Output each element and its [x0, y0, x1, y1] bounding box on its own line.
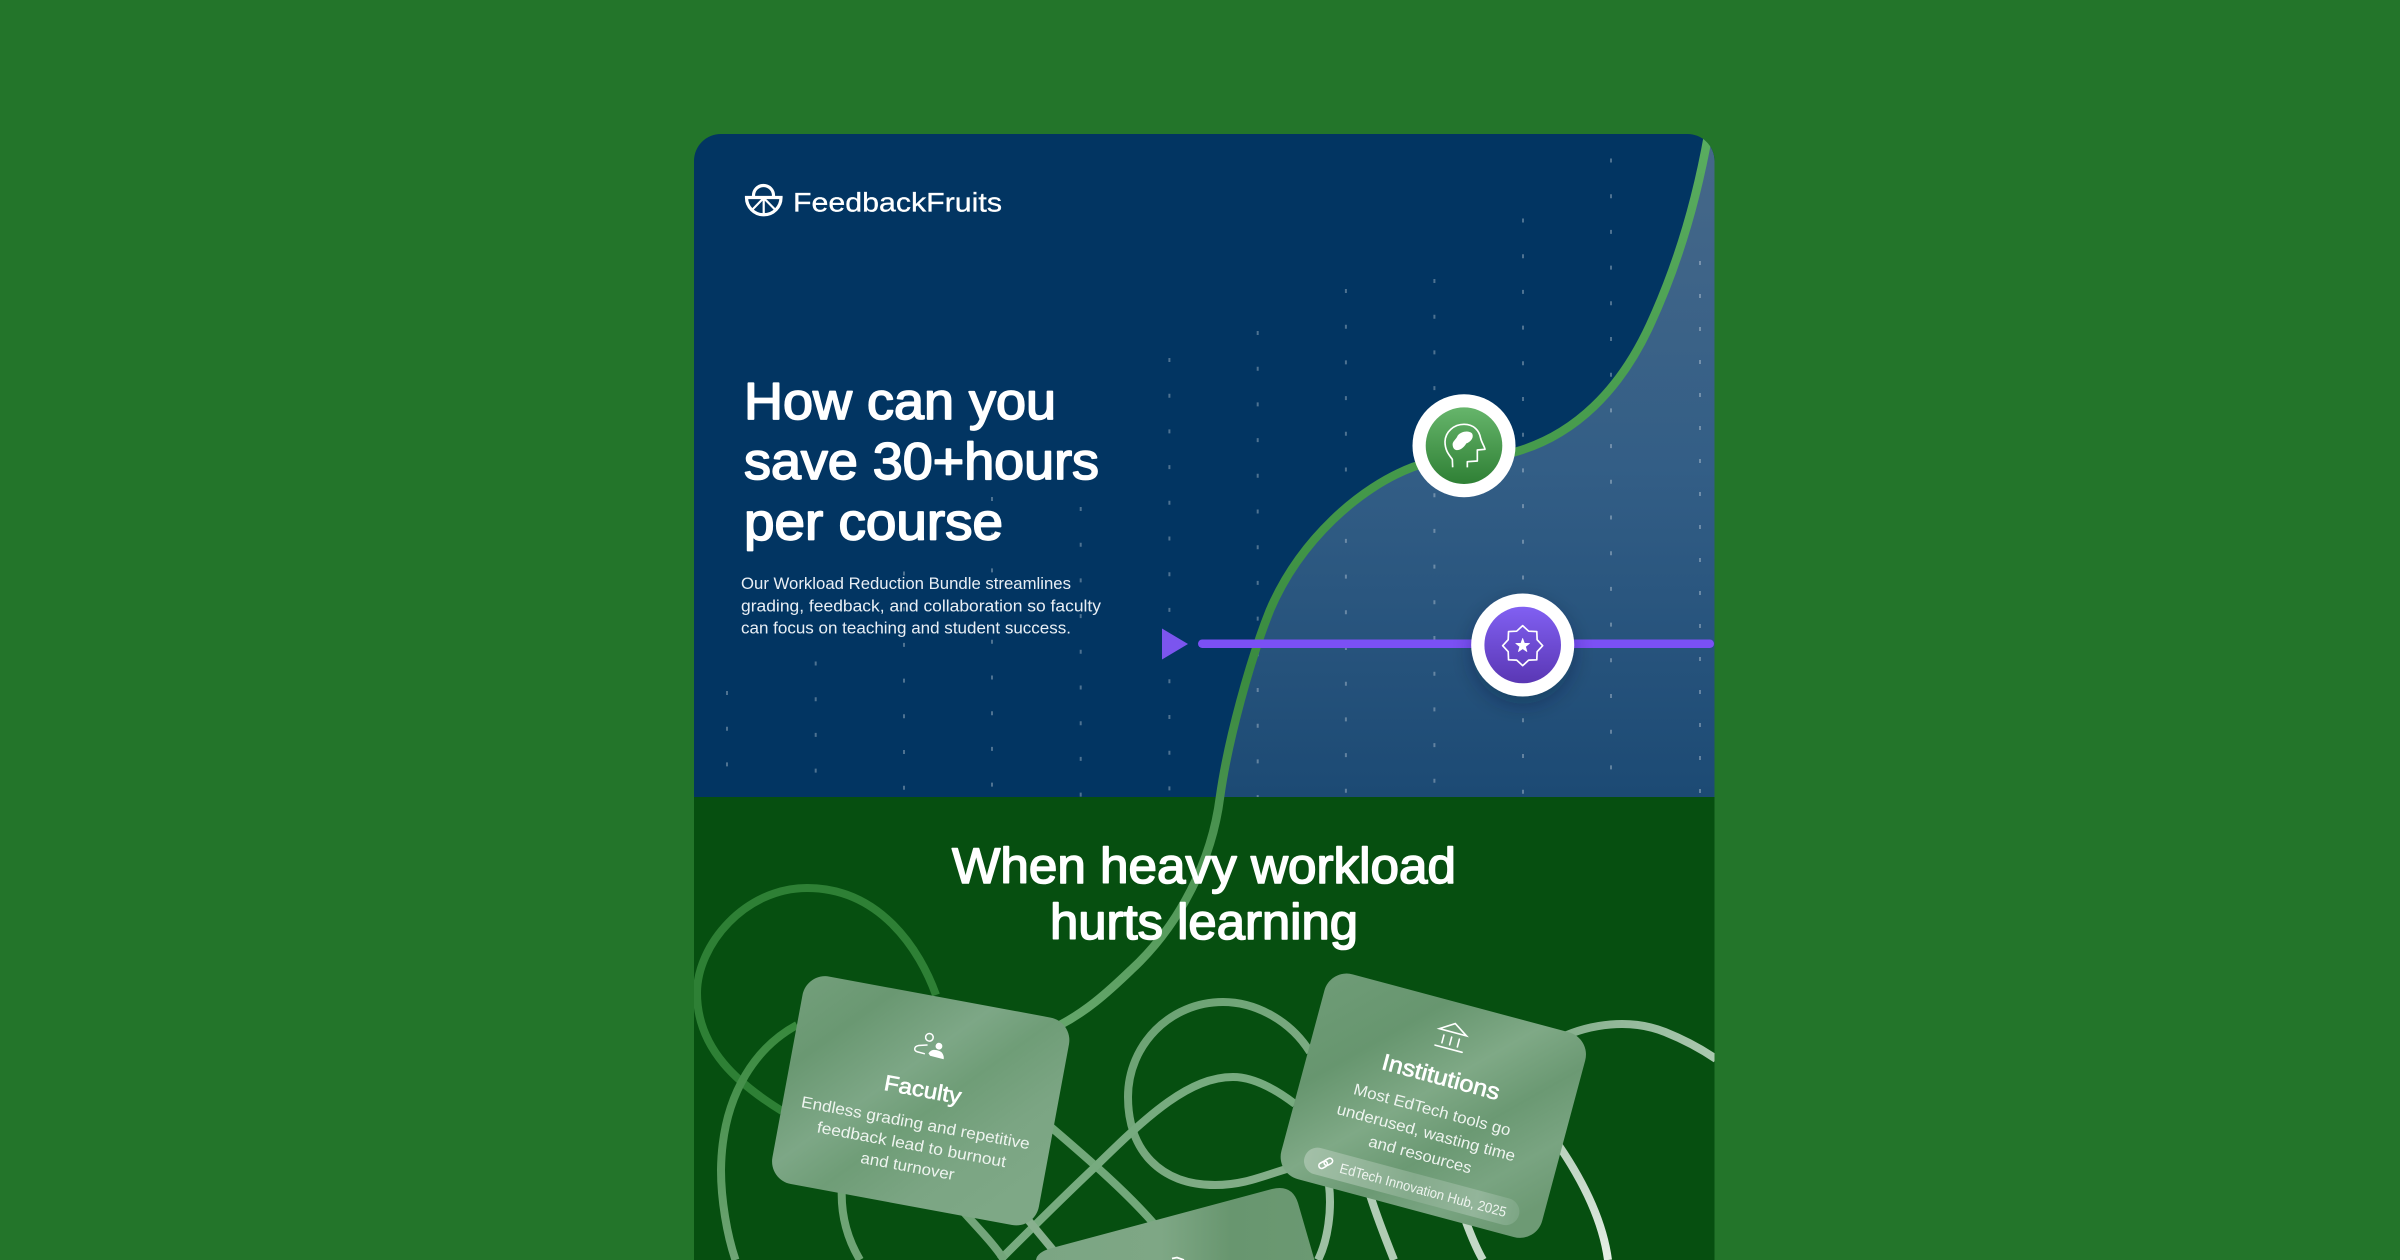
- panel: infographic card: [694, 112, 1720, 1260]
- hero title: save 30+hours: [744, 433, 1099, 491]
- knotted line: diagonal strand behind faculty card: [1052, 1124, 1156, 1222]
- knotted line: short strand near third card: [1026, 1219, 1056, 1250]
- section heading: When heavy workload hurts learning: [952, 838, 1456, 950]
- icon: link: [1318, 1157, 1334, 1169]
- logo wordmark: FeedbackFruits: [793, 188, 1002, 218]
- card title: Faculty: Faculty: [882, 1070, 963, 1109]
- hero title: per course: [744, 494, 1003, 552]
- panel: workload green section: [694, 797, 1715, 1260]
- knotted line: upper right arc: [1560, 1024, 1716, 1059]
- panel: hero navy section: [694, 134, 1715, 797]
- hero description: [741, 574, 1102, 638]
- knotted line: dark oval loop: [697, 888, 936, 1111]
- knotted line: center crossing strand: [1000, 1077, 1295, 1260]
- logo: FeedbackFruits: [746, 186, 1002, 218]
- card text: institutions: underused, wasting time: [1335, 1101, 1517, 1165]
- hero title: How can you: [744, 373, 1056, 431]
- knotted line: center upper loop: [1128, 1002, 1310, 1185]
- icon: fruit logo mark: [746, 186, 781, 215]
- icon: faculty people: [914, 1032, 944, 1060]
- source citation: EdTech Innovation Hub, 2025: [1338, 1160, 1508, 1220]
- knotted line: left descending strand: [721, 1025, 797, 1260]
- chart area under growth curve: [1220, 112, 1720, 797]
- section heading: When heavy workload hurts learning: hurts learning: [1050, 894, 1358, 950]
- card text: faculty: feedback lead to burnout: [815, 1120, 1008, 1171]
- hero description: can focus on teaching and student success.: [741, 618, 1071, 638]
- section heading: When heavy workload hurts learning: When heavy workload: [952, 838, 1456, 894]
- knotted line: strand under institutions card right: [1466, 1222, 1483, 1260]
- knotted line: strand under institutions card left: [1370, 1195, 1394, 1260]
- card text: institutions: and resources: [1367, 1134, 1473, 1177]
- knotted line: short strand below faculty card: [962, 1216, 1003, 1260]
- arrow: purple timeline: [1162, 628, 1714, 660]
- growth curve line: [1060, 112, 1712, 1025]
- card text: faculty: [802, 1096, 1029, 1180]
- knotted line: strand right of third card: [1318, 1185, 1330, 1260]
- icon: institution building: [1435, 1020, 1469, 1052]
- card title: Institutions: Institutions: [1379, 1049, 1503, 1105]
- knotted line: bright right strand: [1555, 1140, 1608, 1260]
- card: Faculty: [768, 972, 1073, 1229]
- icon: green head milestone: [1412, 394, 1516, 497]
- card text: faculty: Endless grading and repetitive: [800, 1094, 1031, 1153]
- knotted line: lower loop under faculty card: [842, 1185, 860, 1260]
- card: Institutions: [1275, 968, 1591, 1243]
- hero description: Our Workload Reduction Bundle streamlines: [741, 574, 1071, 593]
- hero description: grading, feedback, and collaboration so faculty: [741, 596, 1102, 615]
- card text: institutions: [1338, 1084, 1514, 1173]
- card: third stakeholder: [1036, 1188, 1314, 1260]
- card text: institutions: Most EdTech tools go: [1352, 1081, 1513, 1140]
- source pill: [1301, 1145, 1522, 1228]
- icon: purple badge milestone: [1471, 594, 1574, 696]
- card text: faculty: and turnover: [859, 1150, 956, 1184]
- icon: third card icon top: [1172, 1258, 1184, 1260]
- hero title: [744, 373, 1099, 552]
